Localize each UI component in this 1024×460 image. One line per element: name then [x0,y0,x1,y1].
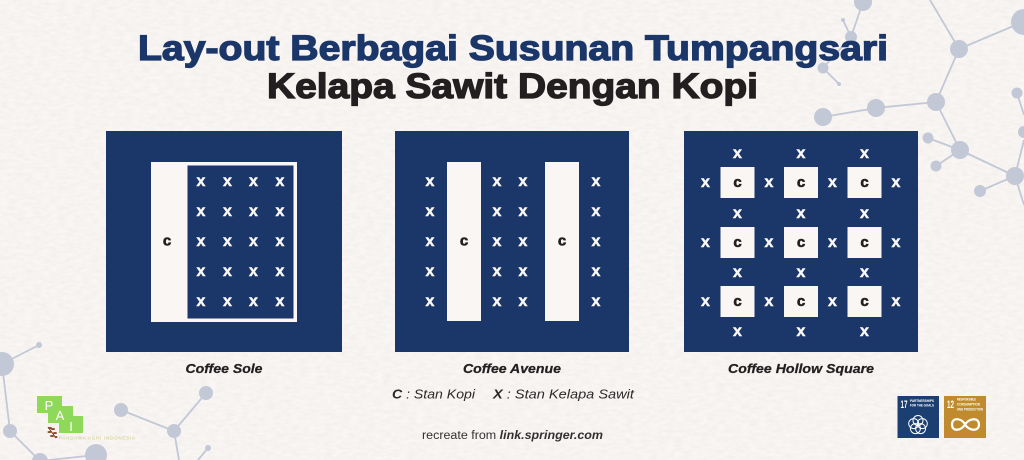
panel: coffee avenue: x [493,173,502,190]
panel: coffee avenue: x [493,203,502,220]
panel: coffee avenue: x [426,203,435,220]
panel: coffee avenue: c [558,232,566,250]
panel: coffee hollow square: x [860,145,869,162]
panel: coffee avenue [395,131,629,352]
panel: coffee avenue: x [493,293,502,310]
panel: coffee hollow square: c [797,293,805,310]
panel: coffee avenue: x [592,233,601,250]
icon: SDG 12 responsible consumption [944,396,986,438]
panel: coffee hollow square: x [733,264,742,281]
panel: coffee avenue: x [592,293,601,310]
panel: coffee hollow square: x [892,234,901,251]
title: Kelapa Sawit Dengan Kopi [267,67,758,106]
panel: coffee hollow square: c [797,174,805,191]
panel: coffee hollow square: x [892,293,901,310]
panel: coffee avenue: x [493,233,502,250]
panel: coffee hollow square: x [765,174,774,191]
icon: SDG 12 responsible consumption: 12 [947,399,954,411]
panel: coffee sole: x [249,263,258,280]
panel: coffee hollow square: x [892,174,901,191]
panel: coffee hollow square: x [765,293,774,310]
panel: coffee hollow square: c [733,293,742,310]
panel: coffee hollow square: x [733,323,742,340]
panel: coffee avenue: x [519,173,528,190]
panel: coffee sole: x [276,263,285,280]
panel: coffee hollow square: c [733,234,742,251]
panel: coffee sole: x [249,173,258,190]
title: Lay-out Berbagai Susunan Tumpangsari [138,29,888,68]
panel: coffee sole: x [276,173,285,190]
panel: coffee sole: x [223,173,232,190]
panel: coffee sole: x [223,203,232,220]
panel: coffee hollow square: x [701,293,710,310]
legend: C : Stan Kopi [392,388,476,402]
title [138,29,888,106]
logo: Pandawa Agri Indonesia: I [69,419,73,434]
panel: coffee hollow square: x [797,145,806,162]
panel: coffee sole: x [197,293,206,310]
panel: coffee sole: x [197,173,206,190]
panel: coffee avenue: x [426,263,435,280]
panel: coffee hollow square: x [860,323,869,340]
panel: coffee hollow square: x [797,323,806,340]
source credit: recreate from link.springer.com [422,430,603,442]
legend [392,388,635,402]
panel: coffee hollow square [684,131,918,352]
panel: coffee hollow square: x [828,234,837,251]
panel: coffee hollow square: c [860,293,869,310]
caption: coffee avenue: Coffee Avenue [463,362,561,376]
icon: SDG 17 partnerships: 17 [900,399,908,411]
panel: coffee hollow square: x [797,205,806,222]
caption: coffee hollow square: Coffee Hollow Square [728,362,874,376]
panel: coffee sole: x [223,263,232,280]
panel: coffee hollow square: x [733,145,742,162]
panel: coffee sole: x [276,203,285,220]
icon: SDG 17 partnerships: PARTNERSHIPS [910,399,935,403]
panel: coffee sole: x [276,293,285,310]
icon: SDG 17 partnerships: FOR THE GOALS [910,404,935,408]
panel: coffee hollow square: c [733,174,742,191]
panel: coffee hollow square: c [860,174,869,191]
panel: coffee sole: x [197,233,206,250]
panel: coffee sole [106,131,342,352]
molecule decoration: bottom left [0,342,213,460]
icon: SDG 12 responsible consumption: RESPONSIBLE [957,398,976,402]
panel: coffee hollow square: c [797,234,805,251]
panel: coffee hollow square: x [797,264,806,281]
panel: coffee avenue: x [519,233,528,250]
panel: coffee sole: x [249,293,258,310]
logo: Pandawa Agri Indonesia [37,396,135,440]
panel: coffee avenue: x [426,173,435,190]
panel: coffee sole: x [276,233,285,250]
panel: coffee sole: x [249,203,258,220]
icon: SDG 17 partnerships [898,396,939,438]
panel: coffee avenue: c [460,232,468,250]
logo: Pandawa Agri Indonesia: PANDAWA AGRI INDONESIA [59,436,135,440]
panel: coffee avenue: x [493,263,502,280]
panel: coffee avenue: x [426,293,435,310]
icon: SDG 12 responsible consumption: CONSUMPTION [957,402,980,406]
panel: coffee avenue: x [592,203,601,220]
panel: coffee avenue: x [519,263,528,280]
panel: coffee hollow square: x [765,234,774,251]
panel: coffee avenue: x [592,173,601,190]
logo: Pandawa Agri Indonesia: P [45,398,53,413]
panel: coffee hollow square: x [860,264,869,281]
legend: X : Stan Kelapa Sawit [492,388,635,402]
panel: coffee sole: x [249,233,258,250]
panel: coffee hollow square: x [701,234,710,251]
panel: coffee hollow square: x [828,174,837,191]
panel: coffee avenue: x [426,233,435,250]
icon: SDG 12 responsible consumption: AND PRODUCTION [957,408,983,412]
panel: coffee sole: x [223,293,232,310]
panel: coffee hollow square: x [733,205,742,222]
molecule decoration: top right [814,0,1024,205]
panel: coffee sole: x [197,263,206,280]
panel: coffee hollow square: c [860,234,869,251]
panel: coffee sole: x [197,203,206,220]
caption: coffee sole: Coffee Sole [186,362,263,376]
panel: coffee avenue: x [519,203,528,220]
panel: coffee hollow square: x [860,205,869,222]
panel: coffee sole: c [163,232,171,250]
logo: Pandawa Agri Indonesia: A [56,408,65,423]
panel: coffee sole: x [223,233,232,250]
panel: coffee hollow square: x [828,293,837,310]
panel: coffee avenue: x [519,293,528,310]
panel: coffee hollow square: x [701,174,710,191]
panel: coffee avenue: x [592,263,601,280]
